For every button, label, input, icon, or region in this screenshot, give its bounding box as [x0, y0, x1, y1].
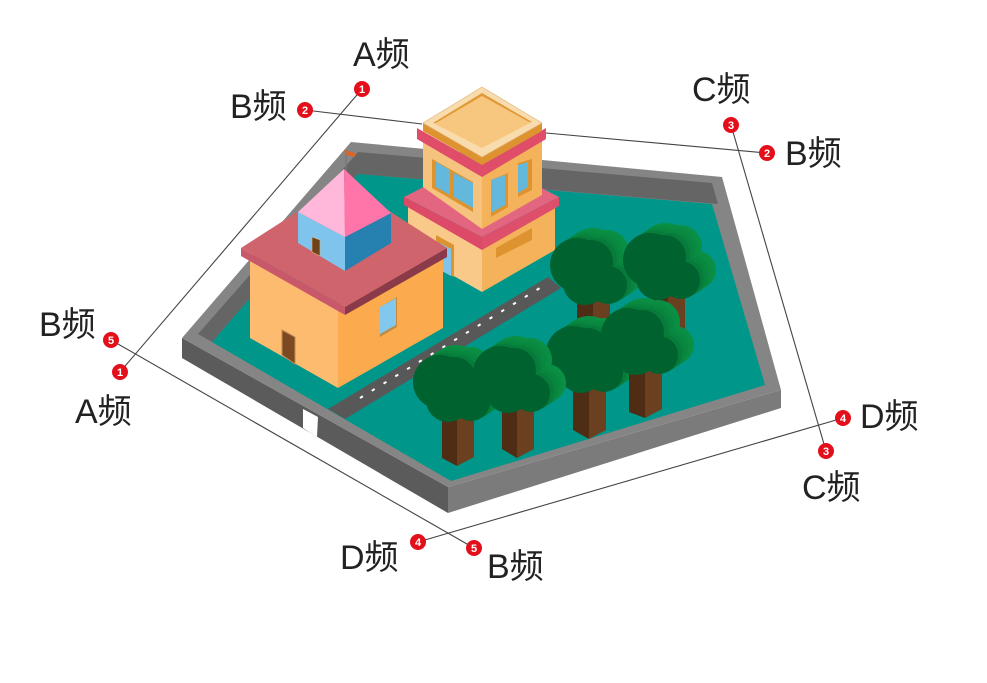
pin 2 left: 2	[302, 105, 308, 117]
pin 3 bottom: 3	[823, 446, 829, 458]
sign	[496, 228, 532, 258]
label: B right: B频	[785, 135, 842, 173]
flat roof	[423, 123, 542, 165]
label: C bottom right: C频	[802, 469, 861, 507]
wall outer faces	[182, 338, 448, 513]
label: B left: B频	[39, 306, 96, 344]
pentagon walled yard	[182, 142, 781, 513]
tree 5	[413, 345, 506, 466]
label: A left: A频	[75, 393, 132, 431]
pin 1 left	[112, 364, 128, 380]
tree 3	[546, 316, 639, 439]
tree 4	[601, 298, 694, 418]
pin 5 bottom	[466, 540, 482, 556]
gate gap	[303, 409, 318, 437]
pin 5 left: 5	[108, 335, 114, 347]
pin 2 right: 2	[764, 148, 770, 160]
upper floor	[423, 140, 482, 229]
window	[380, 297, 397, 337]
lawn	[212, 174, 765, 481]
pin 5 bottom: 5	[471, 543, 477, 555]
pin 1 left: 1	[117, 367, 123, 379]
main house	[241, 169, 447, 388]
pin 4 bottom	[410, 534, 426, 550]
label: D right: D频	[860, 398, 919, 436]
label: A top: A频	[353, 36, 410, 74]
windows	[432, 159, 473, 212]
pin 4 bottom: 4	[415, 537, 422, 549]
lower floor	[408, 205, 482, 292]
roof	[241, 182, 447, 307]
door	[282, 330, 295, 364]
tree 2	[623, 223, 716, 335]
pin 3 top	[723, 117, 739, 133]
label: B bottom: B频	[487, 548, 544, 586]
pin 2 left	[297, 102, 313, 118]
flag	[344, 150, 355, 172]
pin 1 top	[354, 81, 370, 97]
door	[436, 235, 454, 277]
two-storey building	[404, 87, 559, 292]
walls	[250, 256, 338, 388]
wall inner faces	[198, 152, 718, 342]
road	[328, 277, 561, 419]
pin 4 right	[835, 410, 851, 426]
upper band	[417, 128, 546, 177]
label: D bottom: D频	[340, 539, 399, 577]
middle band	[404, 157, 559, 237]
tree 1	[550, 228, 643, 340]
wall top	[182, 142, 781, 487]
label: C top right: C频	[692, 71, 751, 109]
leader lines	[111, 89, 843, 548]
roof cabin	[298, 169, 391, 271]
pin 3 top: 3	[728, 120, 734, 132]
tree 6	[473, 336, 566, 458]
label: B upper left: B频	[230, 88, 287, 126]
pin 5 left	[103, 332, 119, 348]
pin 2 right	[759, 145, 775, 161]
pin 3 bottom	[818, 443, 834, 459]
pin 4 right: 4	[840, 413, 847, 425]
pin 1 top: 1	[359, 84, 365, 96]
